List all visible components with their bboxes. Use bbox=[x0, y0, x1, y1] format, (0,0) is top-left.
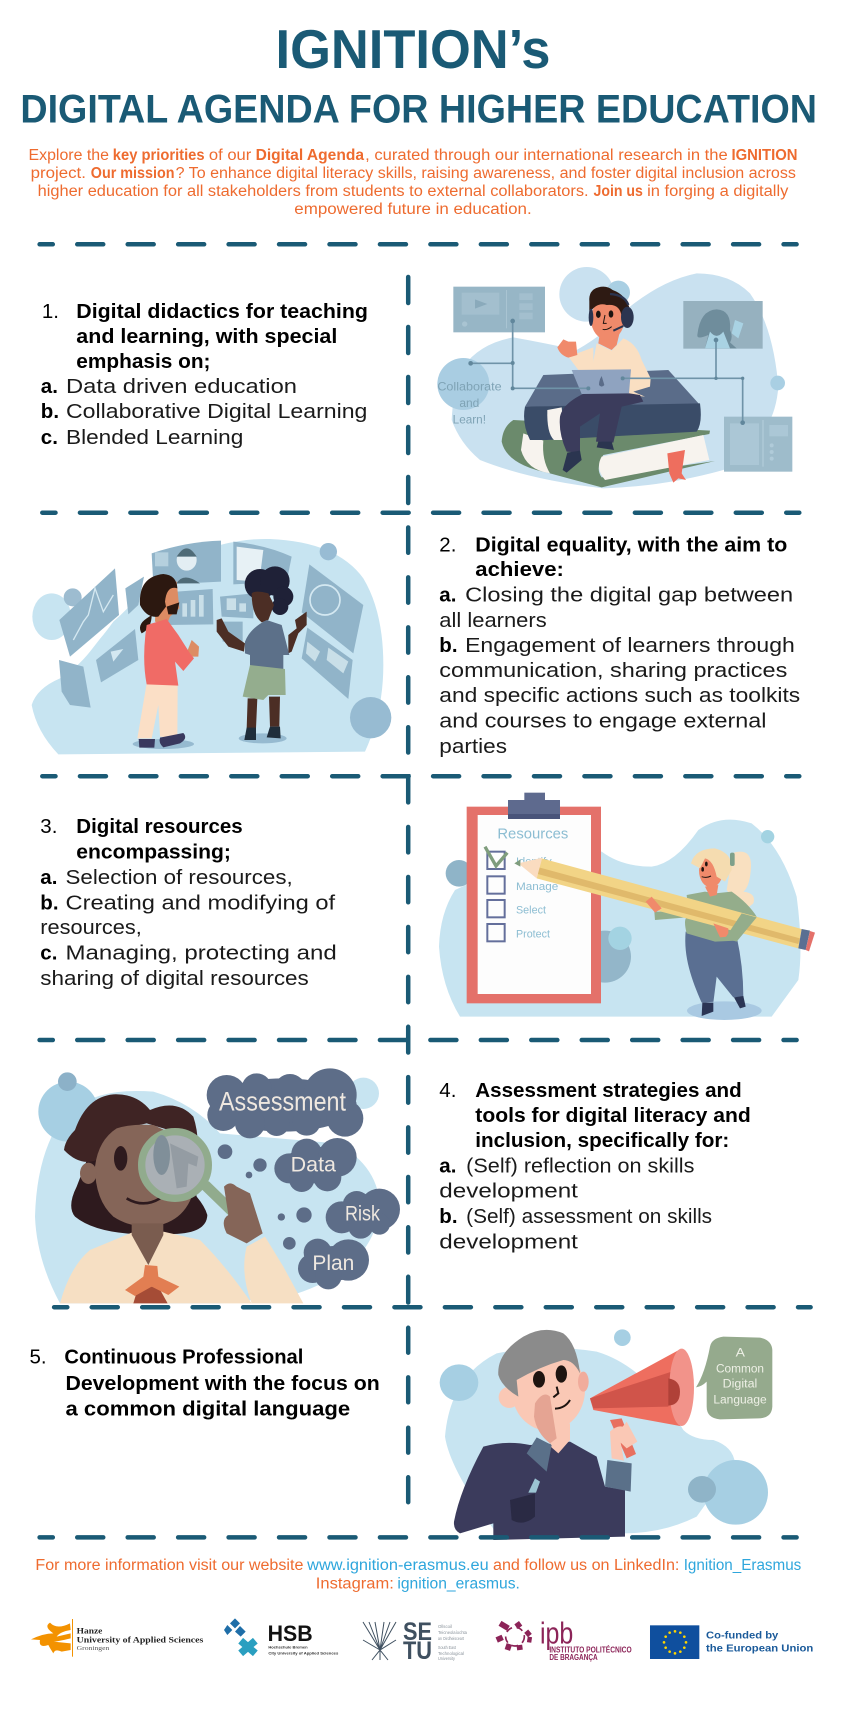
logo: SETU: South East bbox=[438, 1645, 457, 1650]
item 1 text: emphasis on; bbox=[76, 350, 210, 373]
item 2 text bbox=[439, 533, 800, 758]
logo: SETU: SE bbox=[403, 1618, 432, 1646]
item 5 text: Development with the focus on bbox=[66, 1372, 380, 1395]
title bbox=[20, 18, 817, 132]
speech bubble: A bbox=[736, 1346, 745, 1360]
footer links text: www.ignition-erasmus.eu bbox=[306, 1557, 489, 1574]
logo: Hanze: Hanze bbox=[77, 1626, 103, 1635]
pencil bbox=[514, 858, 815, 951]
item 5 text bbox=[30, 1346, 380, 1420]
clipboard bbox=[467, 793, 601, 1003]
title: DIGITAL AGENDA FOR HIGHER EDUCATION bbox=[20, 88, 817, 132]
footer links text: Ignition_Erasmus bbox=[684, 1557, 802, 1574]
clipboard: Resources bbox=[497, 827, 568, 843]
item 4 text: inclusion, specifically for: bbox=[475, 1129, 729, 1152]
item 2 text: communication, sharing practices bbox=[439, 659, 787, 682]
item 3 text: Creating and modifying of bbox=[66, 892, 335, 914]
logo: SETU: Ollscoil bbox=[438, 1624, 452, 1629]
item 1 text: 1. bbox=[42, 300, 59, 323]
logo: Hanze bbox=[31, 1619, 204, 1657]
item 4 text: development bbox=[439, 1230, 578, 1253]
item 5 text: Continuous Professional bbox=[64, 1346, 303, 1369]
item 2 text: all learners bbox=[439, 609, 547, 632]
logo: HSB: Hochschule Bremen bbox=[268, 1646, 308, 1650]
clipboard: Identify bbox=[516, 856, 552, 868]
item 5 text: a common digital language bbox=[66, 1397, 350, 1420]
intro text: project. bbox=[31, 165, 86, 182]
item 3 text: 3. bbox=[40, 815, 57, 838]
item 2 text: Engagement of learners through bbox=[465, 634, 795, 657]
speech bubble: Digital bbox=[723, 1377, 757, 1391]
clipboard: Manage bbox=[516, 881, 558, 893]
intro text: ? To enhance digital literacy skills, raising awareness, and foster digital inclusion across bbox=[176, 165, 796, 182]
item 1 text: c. bbox=[41, 426, 58, 449]
dashed dividers bbox=[40, 244, 811, 1537]
man bbox=[137, 574, 199, 748]
footer links text bbox=[35, 1557, 802, 1592]
item 4 text: b. bbox=[439, 1205, 458, 1228]
item 2 text: Digital equality, with the aim to bbox=[475, 533, 787, 556]
item 3 text bbox=[40, 815, 337, 990]
thought clouds bbox=[207, 1068, 400, 1289]
illustration: resources clipboard bbox=[439, 793, 815, 1020]
cloud labels: Assessment bbox=[219, 1087, 347, 1117]
item 2 text: and courses to engage external bbox=[439, 710, 766, 733]
item 4 text: tools for digital literacy and bbox=[475, 1104, 751, 1127]
logo: Hanze: University of Applied Sciences bbox=[77, 1636, 204, 1645]
item 2 text: b. bbox=[439, 634, 458, 657]
item 3 text: b. bbox=[40, 892, 59, 914]
item 2 text: achieve: bbox=[475, 558, 564, 581]
item 3 text: resources, bbox=[40, 916, 142, 939]
item 2 text: parties bbox=[439, 735, 507, 758]
footer links text: ignition_erasmus. bbox=[397, 1575, 520, 1592]
intro text: empowered future in education. bbox=[294, 201, 532, 218]
label: collaborate and learn: and bbox=[459, 397, 479, 410]
logo: HSB: City University of Applied Sciences bbox=[268, 1651, 338, 1655]
woman bbox=[60, 1094, 303, 1303]
item 3 text: Managing, protecting and bbox=[66, 941, 337, 964]
label: collaborate and learn: Collaborate bbox=[437, 381, 502, 394]
intro text: of our bbox=[209, 147, 251, 164]
logo: SETU: TU bbox=[403, 1637, 432, 1665]
intro text: key priorities bbox=[113, 147, 205, 164]
intro text bbox=[28, 147, 798, 218]
logo: IPB: ipb bbox=[540, 1616, 573, 1650]
footer links text: and follow us on LinkedIn: bbox=[493, 1557, 679, 1574]
item 1 text: Digital didactics for teaching bbox=[76, 300, 368, 323]
woman bbox=[217, 566, 307, 740]
intro text: IGNITION bbox=[732, 147, 798, 164]
character bbox=[654, 848, 762, 1020]
item 1 text: Data driven education bbox=[66, 375, 297, 398]
item 1 text: Collaborative Digital Learning bbox=[66, 400, 367, 423]
cloud labels: Plan bbox=[312, 1251, 354, 1275]
cloud labels bbox=[219, 1087, 380, 1275]
item 4 text bbox=[439, 1079, 751, 1253]
logo: IPB bbox=[497, 1616, 632, 1662]
logo: EU co-funded: the European Union bbox=[706, 1644, 813, 1655]
logo: Hanze: Groningen bbox=[77, 1645, 110, 1652]
magnifier bbox=[142, 1132, 263, 1243]
item 4 text: development bbox=[439, 1180, 578, 1203]
logo: SETU: an Oirdheisceart bbox=[438, 1636, 465, 1641]
item 2 text: and specific actions such as toolkits bbox=[439, 684, 800, 707]
item 3 text: encompassing; bbox=[76, 840, 231, 864]
item 3 text: sharing of digital resources bbox=[40, 967, 309, 990]
illustration: two people and screens bbox=[32, 539, 391, 754]
item 4 text: a. bbox=[439, 1155, 456, 1178]
item 3 text: Selection of resources, bbox=[66, 866, 293, 889]
intro text: , curated through our international research in the bbox=[365, 147, 728, 164]
speech bubble bbox=[696, 1337, 772, 1419]
illustration: teacher on books bbox=[437, 267, 792, 488]
intro text: higher education for all stakeholders from students to external collaborators. bbox=[38, 183, 589, 200]
item 1 text bbox=[41, 300, 368, 449]
illustration: assessment bbox=[35, 1068, 400, 1303]
intro text: in forging a digitally bbox=[647, 183, 789, 200]
item 2 text: Closing the digital gap between bbox=[465, 583, 793, 606]
logo: SETU: University bbox=[438, 1656, 456, 1661]
speech bubble: Common bbox=[716, 1361, 764, 1375]
item 3 text: Digital resources bbox=[76, 815, 243, 838]
item 1 text: Blended Learning bbox=[66, 426, 243, 449]
cloud labels: Risk bbox=[345, 1202, 380, 1226]
logo: EU co-funded bbox=[650, 1625, 813, 1659]
label: collaborate and learn: Learn! bbox=[453, 413, 486, 426]
item 3 text: c. bbox=[40, 941, 57, 964]
logo: IPB: INSTITUTO POLITÉCNICO bbox=[549, 1645, 632, 1654]
man bbox=[454, 1330, 625, 1540]
intro text: Explore the bbox=[28, 147, 109, 164]
logo: HSB: HSB bbox=[268, 1621, 313, 1646]
item 4 text: (Self) assessment on skills bbox=[466, 1205, 712, 1228]
item 1 text: a. bbox=[41, 375, 58, 398]
logo: EU co-funded: Co-funded by bbox=[706, 1630, 779, 1641]
megaphone bbox=[590, 1349, 694, 1492]
intro text: Join us bbox=[594, 183, 643, 200]
item 2 text: a. bbox=[439, 583, 456, 606]
cloud labels: Data bbox=[291, 1153, 336, 1177]
item 1 text: b. bbox=[41, 400, 59, 423]
intro text: Digital Agenda bbox=[256, 147, 364, 164]
item 4 text: Assessment strategies and bbox=[475, 1079, 742, 1102]
clipboard: Select bbox=[516, 904, 546, 916]
logo: HSB bbox=[224, 1618, 338, 1655]
label: collaborate and learn bbox=[437, 381, 502, 426]
item 3 text: a. bbox=[40, 866, 57, 889]
logo: SETU: Teicneolaíochta bbox=[438, 1630, 467, 1635]
clipboard: Protect bbox=[516, 928, 550, 940]
speech bubble: Language bbox=[713, 1392, 767, 1406]
item 2 text: 2. bbox=[439, 533, 456, 556]
footer links text: Instagram: bbox=[316, 1575, 394, 1592]
logo: IPB: DE BRAGANÇA bbox=[549, 1653, 598, 1662]
footer links text: For more information visit our website bbox=[35, 1557, 303, 1574]
logo: SETU bbox=[363, 1618, 467, 1665]
item 4 text: (Self) reflection on skills bbox=[466, 1155, 694, 1178]
item 5 text: 5. bbox=[30, 1346, 47, 1369]
title: IGNITION’s bbox=[276, 18, 550, 80]
logo: SETU: Technological bbox=[438, 1651, 464, 1656]
illustration: man with megaphone bbox=[440, 1329, 772, 1540]
item 4 text: 4. bbox=[439, 1079, 456, 1102]
intro text: Our mission bbox=[91, 165, 174, 182]
item 1 text: and learning, with special bbox=[76, 325, 337, 348]
